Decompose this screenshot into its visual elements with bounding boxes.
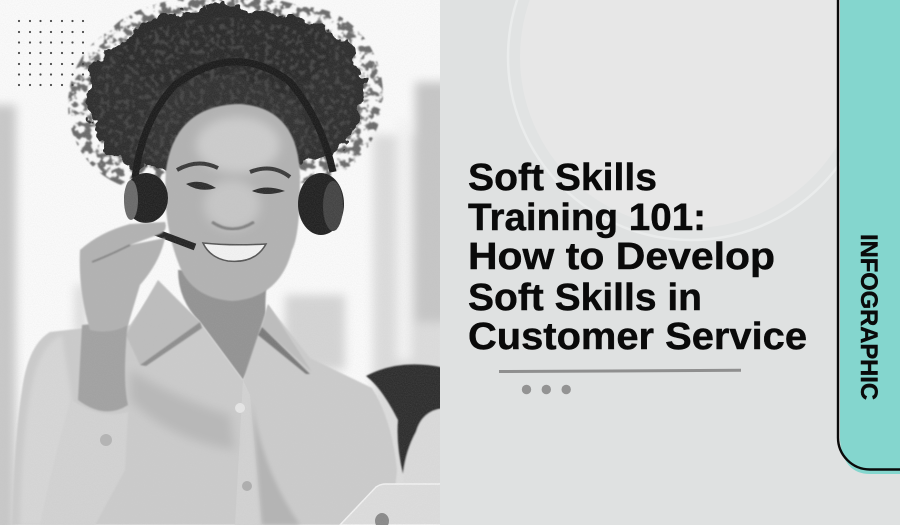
- photo: smiling customer service agent with headset: [0, 0, 450, 525]
- smile: [203, 243, 266, 261]
- photo grain: [6, 1, 440, 464]
- neck: [178, 270, 270, 380]
- background person: [365, 363, 440, 474]
- title: Training 101:: [468, 197, 706, 239]
- blurred background buildings: [0, 82, 450, 525]
- forearm and cuff: [78, 324, 128, 446]
- panel: title background: [440, 0, 900, 525]
- title: [468, 157, 807, 358]
- title: Customer Service: [468, 316, 807, 358]
- title: Soft Skills: [468, 157, 657, 199]
- divider line: [499, 370, 741, 372]
- hair: [68, 0, 383, 190]
- hair highlights: [93, 18, 357, 162]
- dot grid decoration: [18, 20, 84, 86]
- title: Soft Skills in: [468, 277, 702, 319]
- title: How to Develop: [468, 236, 775, 278]
- side tab label: INFOGRAPHIC: [855, 234, 882, 400]
- headset: [124, 62, 344, 247]
- tablet: [340, 484, 445, 525]
- three dots: [522, 385, 571, 394]
- face: [165, 104, 300, 301]
- hand holding microphone: [80, 222, 166, 332]
- hair curly fringe: [68, 0, 383, 190]
- nose: [212, 222, 254, 229]
- side tab: [838, 0, 900, 474]
- hair core: [87, 8, 363, 185]
- eyes and brows: [177, 163, 290, 177]
- shirt collars: [126, 280, 200, 365]
- shirt: [12, 280, 397, 525]
